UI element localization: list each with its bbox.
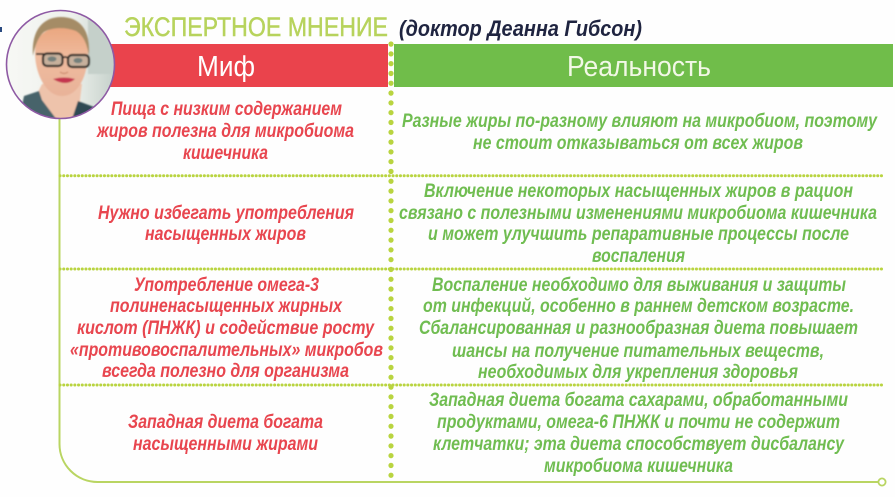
myth 3: всегда полезно для организма [102,360,349,382]
reality 4 [429,389,848,477]
myth 4 [128,411,323,455]
myth 1 [96,98,354,164]
myth 1: жиров полезна для микробиома [96,120,354,142]
myth 3: Употребление омега-3 [134,274,319,296]
header: myth: Миф [197,51,255,83]
myth 2: Нужно избегать употребления [98,202,354,224]
reality 2 [399,180,877,267]
title: ЭКСПЕРТНОЕ МНЕНИЕ [124,12,388,42]
myth 3: полиненасыщенных жирных [110,295,343,317]
column divider [388,44,394,477]
myth 3: кислот (ПНЖК) и содействие росту [77,317,375,339]
myth 1: кишечника [183,142,268,164]
myth 2: насыщенных жиров [145,223,306,245]
myth 2 [98,202,354,245]
frame: outline of the table [60,118,886,486]
mouth [53,78,75,83]
header: myth [100,44,388,87]
glasses [43,54,62,66]
reality 3: необходимых для укрепления здоровья [478,361,798,383]
myth 1: Пища с низким содержанием [111,98,342,120]
column: myths [70,98,383,455]
neck and chest [38,84,82,122]
row dividers [60,176,885,385]
reality 1: не стоит отказываться от всех жиров [473,132,803,154]
hair [33,17,89,56]
reality 3: шансы на получение питательных веществ, [452,340,824,362]
myth 3: «противовоспалительных» микробов [70,339,383,361]
header: reality [394,44,893,87]
myth 3 [70,274,383,382]
reality 4: микробиома кишечника [544,455,733,477]
myth 4: насыщенными жирами [133,433,318,455]
title: (доктор Деанна Гибсон) [399,16,642,41]
reality 1 [402,110,878,154]
myth 4: Западная диета богата [128,411,323,433]
reality 2: воспаления [592,245,685,267]
column: reality [399,110,878,477]
portrait: Deanna Gibson [5,9,118,125]
nose [60,72,68,74]
header: reality: Реальность [567,51,711,83]
title [124,12,642,42]
reality 3 [419,274,858,383]
face [35,27,88,96]
jacket [22,90,56,118]
